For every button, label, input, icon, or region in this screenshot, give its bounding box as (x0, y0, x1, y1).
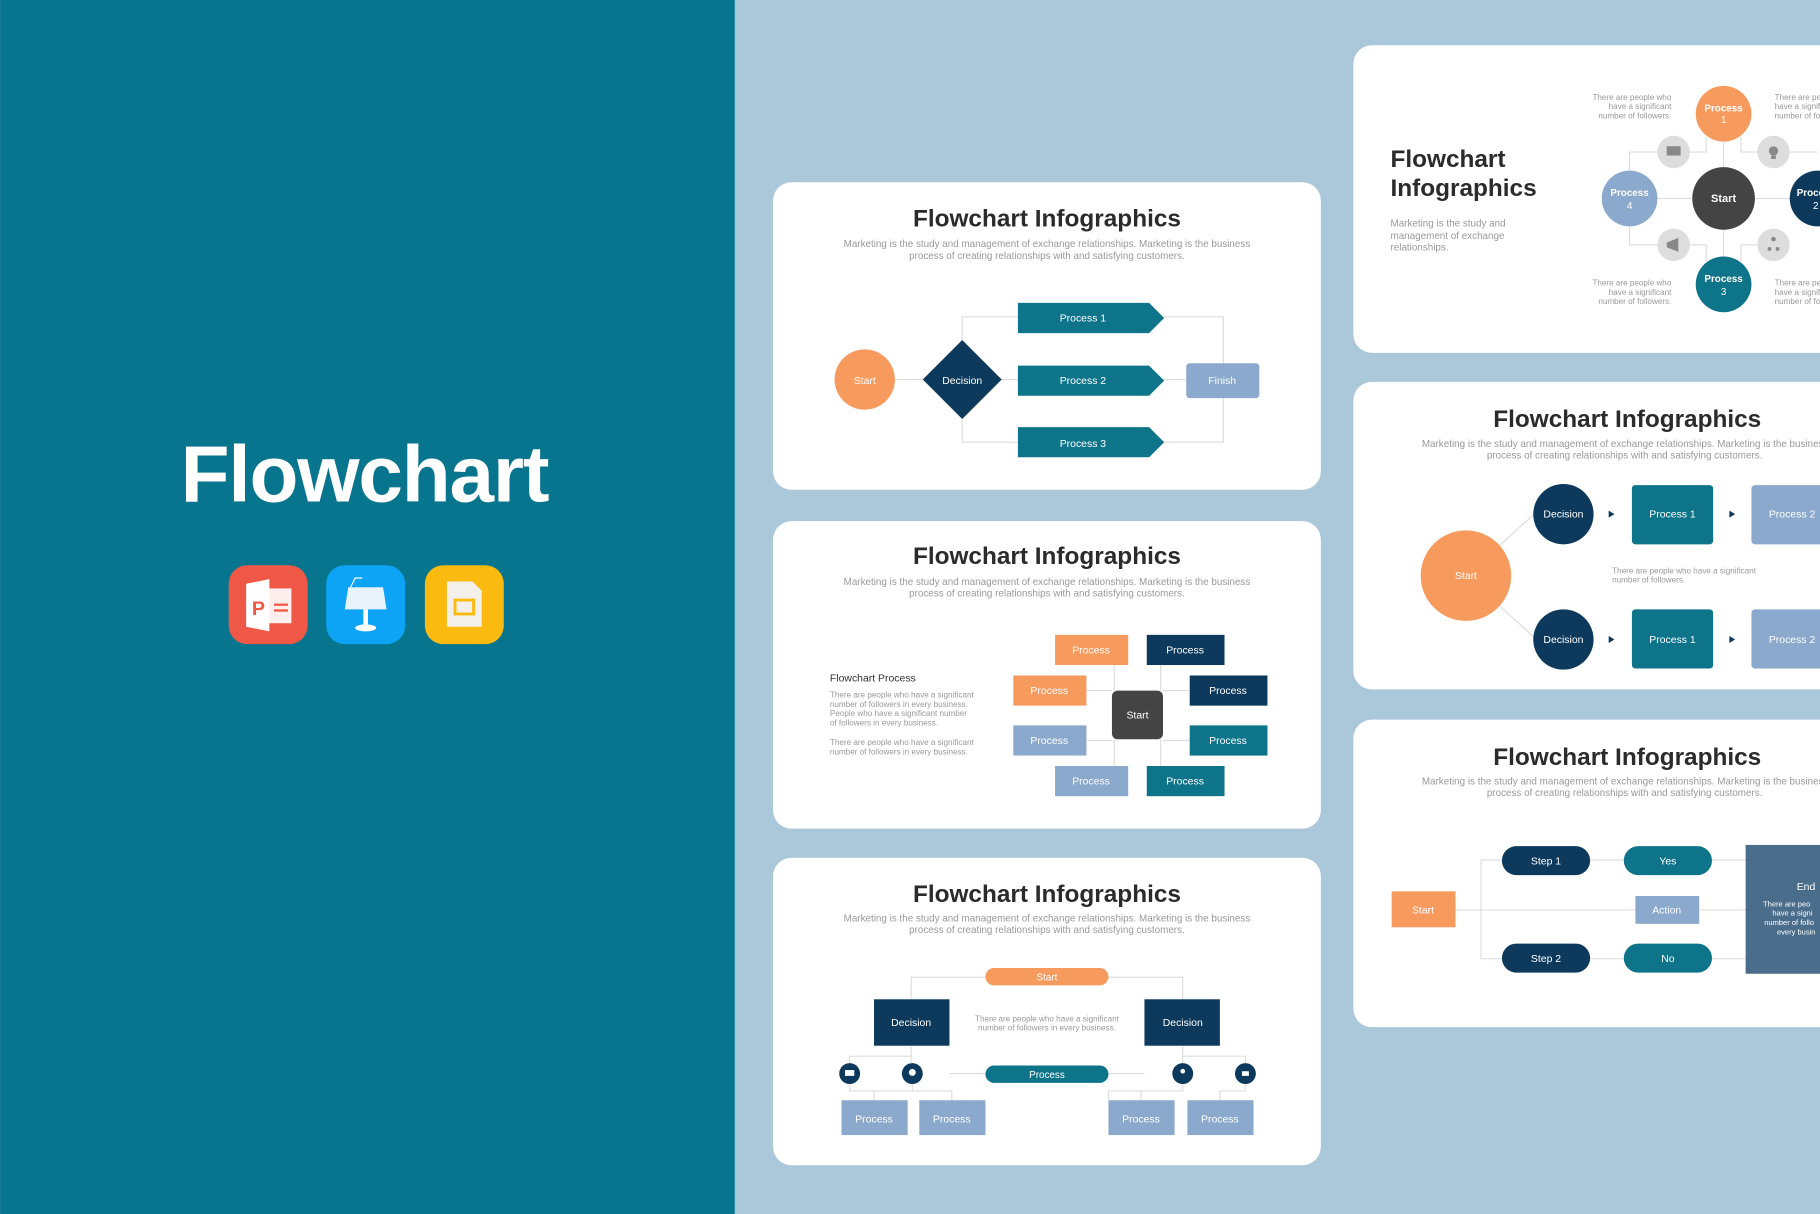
card: yes/no flowchart: Marketing is the study and management of exchange relationships. Marketing is the business (1422, 777, 1820, 788)
card: radial process boxes: Flowchart Infographics (913, 543, 1181, 570)
card: circular flowchart: 3 (1721, 287, 1727, 298)
card: radial process boxes: Marketing is the study and management of exchange relationships. Marketing is the business (844, 577, 1250, 588)
card: branching start: process of creating relationships with and satisfying customers. (1487, 450, 1762, 461)
card: yes/no flowchart: No (1661, 954, 1675, 965)
card: branching start: number of followers. (1612, 576, 1685, 585)
card: yes/no flowchart: process of creating relationships with and satisfying customers. (1487, 788, 1762, 799)
icon: powerpoint: P (252, 598, 265, 620)
card: decision tree: Process (1201, 1114, 1239, 1125)
card: circular flowchart: relationships. (1390, 243, 1449, 254)
card: radial process boxes: People who have a significant number (830, 709, 967, 718)
card: circular flowchart: Process (1704, 103, 1743, 114)
card: radial process boxes: Process (1166, 645, 1204, 656)
card: decision tree: Process (1122, 1114, 1160, 1125)
card: decision tree: Decision (1163, 1018, 1203, 1029)
card: circular flowchart: 4 (1627, 201, 1633, 212)
card: yes/no flowchart: There are peo (1763, 899, 1810, 908)
card: radial process boxes: Process (1166, 777, 1204, 788)
card: radial process boxes: Process (1209, 686, 1247, 697)
card: circular flowchart: Process (1704, 274, 1743, 285)
card: branching start: Flowchart Infographics (1493, 406, 1761, 433)
card: circular flowchart: number of followers. (1598, 297, 1671, 306)
card: decision tree: Process (1029, 1070, 1065, 1081)
card: radial process boxes: Process (1209, 736, 1247, 747)
card: circular flowchart: 2 (1813, 201, 1818, 212)
card: decision flowchart: Process 3 (1060, 439, 1106, 450)
card: radial process boxes: Start (1126, 710, 1149, 721)
card: circular flowchart: Marketing is the study and (1390, 218, 1506, 229)
card: decision tree: Marketing is the study and management of exchange relationships. Marketing is the business (844, 914, 1250, 925)
card: yes/no flowchart: have a signi (1772, 909, 1813, 918)
card: circular flowchart: 1 (1721, 115, 1726, 126)
card: branching start: Decision (1543, 510, 1584, 521)
card: yes/no flowchart: every busin (1777, 927, 1815, 936)
card: decision tree (773, 858, 1321, 1165)
card: circular flowchart: have a significant (1609, 102, 1672, 111)
card: decision flowchart: Decision (942, 376, 982, 387)
card: radial process boxes: of followers in every business. (830, 718, 938, 727)
card: circular flowchart: There are people who (1592, 93, 1672, 102)
icon: keynote (326, 565, 405, 644)
card: decision flowchart: Process 2 (1060, 376, 1106, 387)
card: radial process boxes: number of followers in every business. (830, 700, 968, 709)
card: decision tree: Decision (891, 1018, 931, 1029)
card: decision tree: Flowchart Infographics (913, 881, 1181, 908)
card: decision tree: process of creating relationships with and satisfying customers. (909, 925, 1185, 936)
main title: Flowchart (181, 429, 549, 518)
card: yes/no flowchart: End (1797, 882, 1815, 893)
card: decision tree: Process (855, 1114, 893, 1125)
card: radial process boxes: number of followers in every business. (830, 747, 968, 756)
card: radial process boxes (773, 521, 1321, 829)
card: yes/no flowchart: Yes (1659, 857, 1676, 868)
card: radial process boxes: process of creating relationships with and satisfying customers. (909, 589, 1185, 600)
card: decision tree: Process (933, 1114, 971, 1125)
card: circular flowchart: have a significant (1609, 288, 1672, 297)
left panel (0, 0, 735, 1214)
card: decision flowchart (773, 182, 1321, 490)
card: yes/no flowchart: Step 2 (1531, 954, 1561, 965)
card: circular flowchart: number of followers. (1598, 111, 1671, 120)
card: decision flowchart: Process 1 (1060, 313, 1106, 324)
card: decision tree: There are people who have a significant (975, 1014, 1120, 1023)
card: radial process boxes: Process (1030, 686, 1068, 697)
card: yes/no flowchart: Action (1652, 905, 1681, 916)
card: decision flowchart: Start (854, 376, 876, 387)
card: radial process boxes: There are people who have a significant (830, 691, 974, 700)
card: branching start (1353, 382, 1820, 689)
card: radial process boxes: There are people who have a significant (830, 738, 974, 747)
card: decision tree: Start (1037, 973, 1058, 984)
card: branching start: Process 2 (1769, 510, 1815, 521)
card: circular flowchart: There are people who (1592, 279, 1672, 288)
card: decision flowchart: Flowchart Infographics (913, 205, 1181, 232)
card: branching start: Start (1455, 571, 1477, 582)
card: yes/no flowchart: Step 1 (1531, 857, 1561, 868)
icon: powerpoint (229, 565, 308, 644)
card: radial process boxes: Process (1072, 645, 1110, 656)
card: circular flowchart: Infographics (1390, 175, 1537, 202)
card: branching start: Process 2 (1769, 635, 1815, 646)
card: branching start: Process 1 (1649, 510, 1696, 521)
card: circular flowchart: Process (1610, 188, 1649, 199)
card: radial process boxes: Flowchart Process (830, 673, 916, 684)
card: branching start: Marketing is the study and management of exchange relationships. Marketing is the business (1422, 439, 1820, 450)
card: decision tree: number of followers in every business. (978, 1024, 1116, 1033)
card: yes/no flowchart: number of follo (1764, 918, 1814, 927)
icon: google slides (425, 565, 504, 644)
card: radial process boxes: Process (1072, 777, 1110, 788)
card: branching start: Process 1 (1649, 635, 1696, 646)
card: yes/no flowchart (1353, 720, 1820, 1027)
card: decision flowchart: process of creating relationships with and satisfying customers. (909, 251, 1185, 262)
card: radial process boxes: Process (1030, 736, 1068, 747)
card: circular flowchart: Flowchart (1390, 146, 1506, 173)
card: decision flowchart: Finish (1208, 376, 1236, 387)
card: circular flowchart: management of exchange (1390, 231, 1505, 242)
card: decision flowchart: Marketing is the study and management of exchange relationships. Marketing is the business (844, 239, 1250, 250)
card: circular flowchart: Start (1711, 193, 1736, 205)
card: branching start: There are people who have a significant (1612, 566, 1757, 575)
card: branching start: Decision (1543, 635, 1584, 646)
card: yes/no flowchart: Start (1412, 905, 1434, 916)
card: circular flowchart (1353, 45, 1820, 353)
card: yes/no flowchart: Flowchart Infographics (1493, 744, 1761, 771)
